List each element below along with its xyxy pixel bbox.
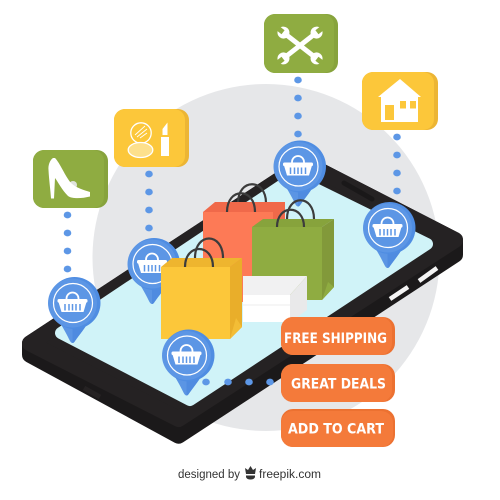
location pin: right: [363, 202, 416, 268]
dotted connector: shoe: [64, 212, 71, 272]
gray background circle: [92, 84, 440, 431]
button: add to cart: [281, 409, 395, 447]
button: great deals: [281, 364, 395, 402]
dotted connector: home: [393, 134, 401, 194]
card: high heel shoe: [33, 150, 108, 208]
footer credit: designed by: [178, 469, 240, 481]
orange shopping bag: [203, 184, 285, 302]
yellow shopping bag: [161, 238, 242, 339]
location pin: bottom: [162, 330, 214, 396]
card: tools: [264, 14, 338, 73]
icon: freepik crown: [245, 466, 256, 480]
footer credit: freepik.com: [259, 469, 321, 481]
icon: compact and lipstick: [128, 122, 169, 158]
icon: house: [378, 79, 421, 122]
icon: high heel: [48, 158, 90, 198]
button: add to cart: ADD TO CART: [288, 422, 384, 438]
footer credit: [178, 466, 321, 481]
card: cosmetics: [114, 109, 189, 167]
dotted connector: tools: [294, 77, 302, 137]
button: free shipping: FREE SHIPPING: [284, 331, 387, 347]
dotted connector: buttons: [202, 379, 274, 385]
card: home: [362, 72, 438, 130]
location pin: left middle: [128, 238, 180, 304]
dotted connector: cosmetics: [145, 171, 153, 231]
button: free shipping: [281, 317, 395, 355]
white gift box: [243, 276, 307, 322]
button: great deals: GREAT DEALS: [291, 376, 386, 392]
green shopping bag: [252, 200, 334, 300]
location pin: far left: [48, 277, 100, 343]
smartphone: [30, 163, 455, 436]
icon: crossed wrenches: [273, 23, 327, 68]
location pin: top: [274, 140, 326, 206]
